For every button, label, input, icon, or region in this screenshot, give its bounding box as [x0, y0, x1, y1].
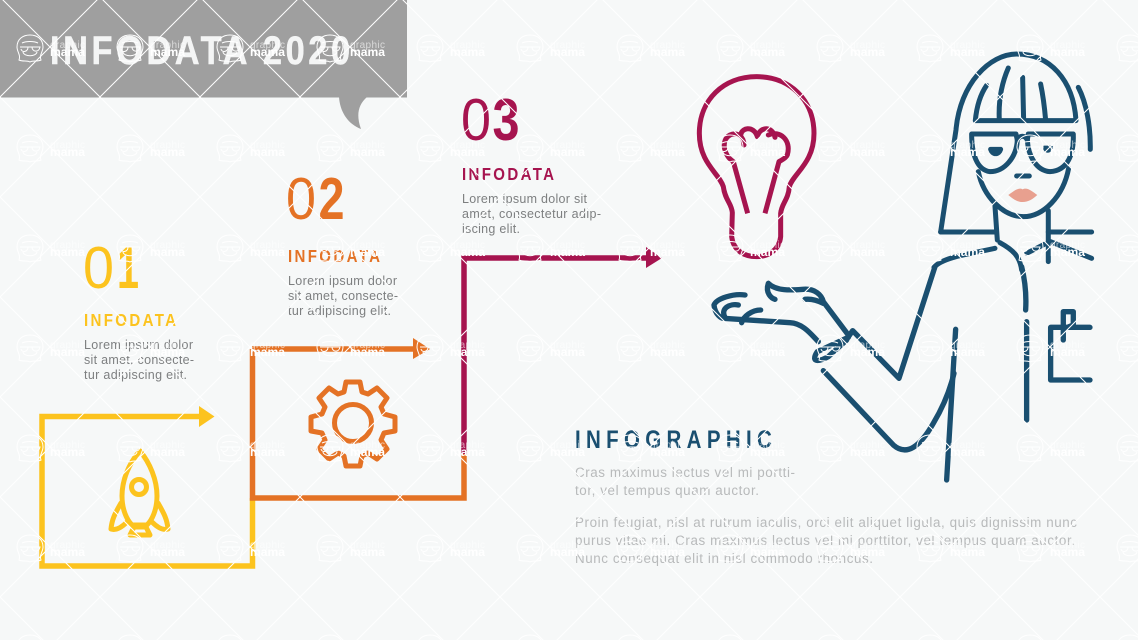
step 02 text: 0	[286, 166, 316, 232]
body text: intro: Cras maximus lectus vel mi portti-	[575, 465, 795, 480]
step 01 text: 0	[83, 235, 114, 301]
arrow: yellow step	[42, 406, 252, 566]
step 02 text	[286, 166, 398, 318]
icon: light bulb	[699, 77, 814, 257]
step 01 text	[83, 235, 194, 382]
woman illustration: head	[934, 54, 1092, 270]
body text: paragraph: purus vitae mi. Cras maximus lectus vel mi porttitor, vel tempus quam auctor.	[575, 533, 1075, 548]
step 03 text: Lorem ipsum dolor sit	[462, 192, 588, 206]
step 02 text: sit amet, consecte-	[288, 289, 398, 303]
step 02 text: Lorem ipsum dolor	[288, 274, 397, 288]
step 02 text: 2	[318, 166, 344, 232]
step 01 text: Lorem ipsum dolor	[84, 338, 193, 352]
title banner	[0, 0, 407, 129]
step 01 text: sit amet, consecte-	[84, 353, 194, 367]
step 01 text: 1	[117, 235, 139, 301]
step 03 text	[461, 87, 601, 236]
step 03 text: INFODATA	[462, 165, 554, 184]
step 01 text: INFODATA	[84, 311, 176, 330]
lips	[1008, 189, 1037, 202]
step 02 text: tur adipiscing elit.	[288, 304, 391, 318]
step 03 text: 0	[461, 87, 491, 153]
icon: rocket	[111, 451, 168, 535]
woman illustration: arm and body	[714, 267, 1090, 480]
heading: infographic: INFOGRAPHIC	[575, 425, 772, 453]
arrow: crimson step	[464, 247, 662, 454]
step 01 text: tur adipiscing elit.	[84, 368, 187, 382]
body text: paragraph: Nunc consequat elit in nisl commodo rhoncus.	[575, 551, 873, 566]
icon: gear	[311, 382, 395, 466]
body text: intro	[575, 465, 795, 498]
step 03 text: 3	[492, 87, 520, 153]
body text: paragraph: Proin feugiat, nisl at rutrum iaculis, orci elit aliquet ligula, quis dignissim nunc	[575, 515, 1077, 530]
body text: intro: tor, vel tempus quam auctor.	[575, 483, 759, 498]
arrow: orange step	[252, 338, 464, 498]
step 02 text: INFODATA	[288, 247, 380, 266]
step 03 text: amet, consectetur adip-	[462, 207, 601, 221]
title: INFODATA 2020	[50, 28, 350, 73]
step 03 text: iscing elit.	[462, 222, 520, 236]
body text: paragraph	[575, 515, 1077, 566]
